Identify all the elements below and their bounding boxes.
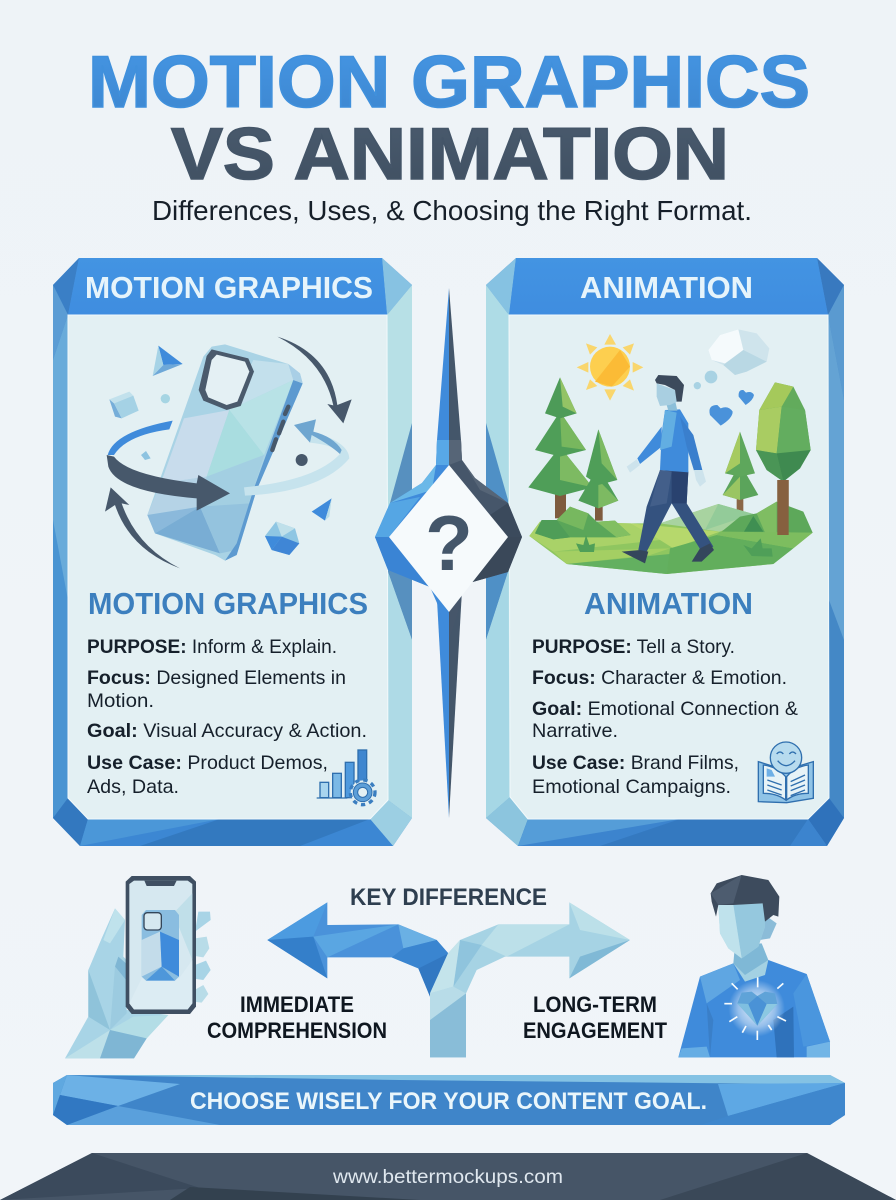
- illustration: person walking in park: [528, 329, 813, 574]
- torso: [678, 960, 830, 1057]
- panel frame: [486, 258, 844, 846]
- thought bubbles: [694, 371, 717, 389]
- sun: [577, 334, 643, 401]
- mini phone: [142, 910, 179, 981]
- hearts: [709, 390, 754, 426]
- header label: MOTION GRAPHICS: [85, 270, 373, 305]
- ground: [529, 480, 813, 574]
- phone screen: [129, 881, 192, 1009]
- floating shards: [141, 451, 332, 521]
- panel header: [68, 258, 387, 315]
- label: long-term engagement: ENGAGEMENT: [523, 1018, 667, 1043]
- phone body: [147, 344, 303, 561]
- hair: [711, 875, 779, 922]
- text block: attributes: Use Case: Product Demos,: [87, 752, 328, 774]
- cloud: [708, 329, 769, 375]
- tree 1: [528, 377, 593, 518]
- panel: motion graphics: [53, 258, 412, 846]
- text block: attributes: Focus: Designed Elements in: [87, 667, 346, 689]
- panel body: [68, 315, 388, 819]
- footer band: [0, 1153, 896, 1200]
- title: [88, 42, 810, 195]
- tree 2: [578, 429, 618, 521]
- text block: attributes: Motion.: [87, 690, 154, 712]
- floating dots: [161, 394, 308, 466]
- diamond frame: [375, 440, 522, 640]
- ring: light arc: [244, 432, 349, 496]
- section: key difference: [65, 875, 830, 1058]
- icon: smiling book: [758, 742, 813, 803]
- floating cube: [109, 392, 139, 418]
- side buttons: [272, 407, 288, 450]
- subtitle: Differences, Uses, & Choosing the Right Format.: [152, 195, 752, 226]
- person: [622, 375, 714, 563]
- vertical spike: [436, 288, 462, 818]
- center question emblem: [375, 288, 522, 818]
- camera module: [199, 349, 254, 410]
- floating polyhedron: [265, 522, 299, 555]
- illustration: person with glowing heart: [678, 875, 830, 1057]
- heart glow: [728, 980, 785, 1037]
- panel: animation: [486, 258, 844, 846]
- text block: attributes: PURPOSE: Tell a Story.: [532, 636, 735, 658]
- text block: attributes: Use Case: Brand Films,: [532, 752, 739, 774]
- heart: [737, 992, 777, 1026]
- arrow: right light: [430, 902, 630, 1057]
- label: immediate comprehension: IMMEDIATE: [240, 992, 354, 1017]
- arrow: bottom left: [105, 487, 180, 568]
- illustration: hand holding phone: [65, 876, 211, 1058]
- text block: attributes: Narrative.: [532, 720, 618, 742]
- text block: attributes: Emotional Campaigns.: [532, 776, 731, 798]
- title: MOTION GRAPHICS: [88, 42, 810, 123]
- title: VS ANIMATION: [171, 114, 729, 195]
- tree 4: [756, 382, 811, 535]
- text block: attributes: [532, 636, 798, 798]
- footer: [0, 1153, 896, 1200]
- label: long-term engagement: LONG-TERM: [533, 992, 657, 1017]
- text block: attributes: Ads, Data.: [87, 776, 179, 798]
- arrow: left blue: [267, 902, 448, 997]
- panel body: [509, 315, 829, 819]
- ring: arrow head: [294, 419, 342, 454]
- text block: attributes: Goal: Emotional Connection &: [532, 698, 798, 720]
- panel header: [509, 258, 828, 315]
- arrow: top right: [277, 337, 352, 423]
- question mark: ?: [425, 499, 473, 587]
- label: immediate comprehension: COMPREHENSION: [207, 1018, 387, 1043]
- banner text: CHOOSE WISELY FOR YOUR CONTENT GOAL.: [190, 1088, 707, 1115]
- tree 3: [723, 432, 758, 511]
- ring: dark arrow: [107, 455, 230, 511]
- text block: attributes: Goal: Visual Accuracy & Action.: [87, 720, 367, 742]
- illustration: rotating phone: [105, 337, 352, 568]
- footer url: www.bettermockups.com: [332, 1167, 563, 1188]
- text block: attributes: Focus: Character & Emotion.: [532, 667, 787, 689]
- glow rays: [724, 977, 786, 1040]
- diamond center: [389, 465, 508, 612]
- floating pyramid: [153, 346, 183, 376]
- banner shape: [53, 1075, 845, 1125]
- hand: [65, 908, 211, 1058]
- heading: KEY DIFFERENCE: [350, 884, 547, 911]
- neck and face: [718, 903, 777, 975]
- header label: ANIMATION: [580, 270, 753, 305]
- phone: [126, 876, 196, 1014]
- text block: attributes: [87, 636, 367, 798]
- label: long-term engagement: [523, 992, 667, 1043]
- subheading: ANIMATION: [584, 586, 753, 621]
- icon: chart and gear: [317, 750, 375, 805]
- label: immediate comprehension: [207, 992, 387, 1043]
- text block: attributes: PURPOSE: Inform & Explain.: [87, 636, 337, 658]
- panel frame: [53, 258, 412, 846]
- ring: blue arc: [108, 421, 173, 455]
- subheading: MOTION GRAPHICS: [88, 586, 368, 621]
- banner: [53, 1075, 845, 1125]
